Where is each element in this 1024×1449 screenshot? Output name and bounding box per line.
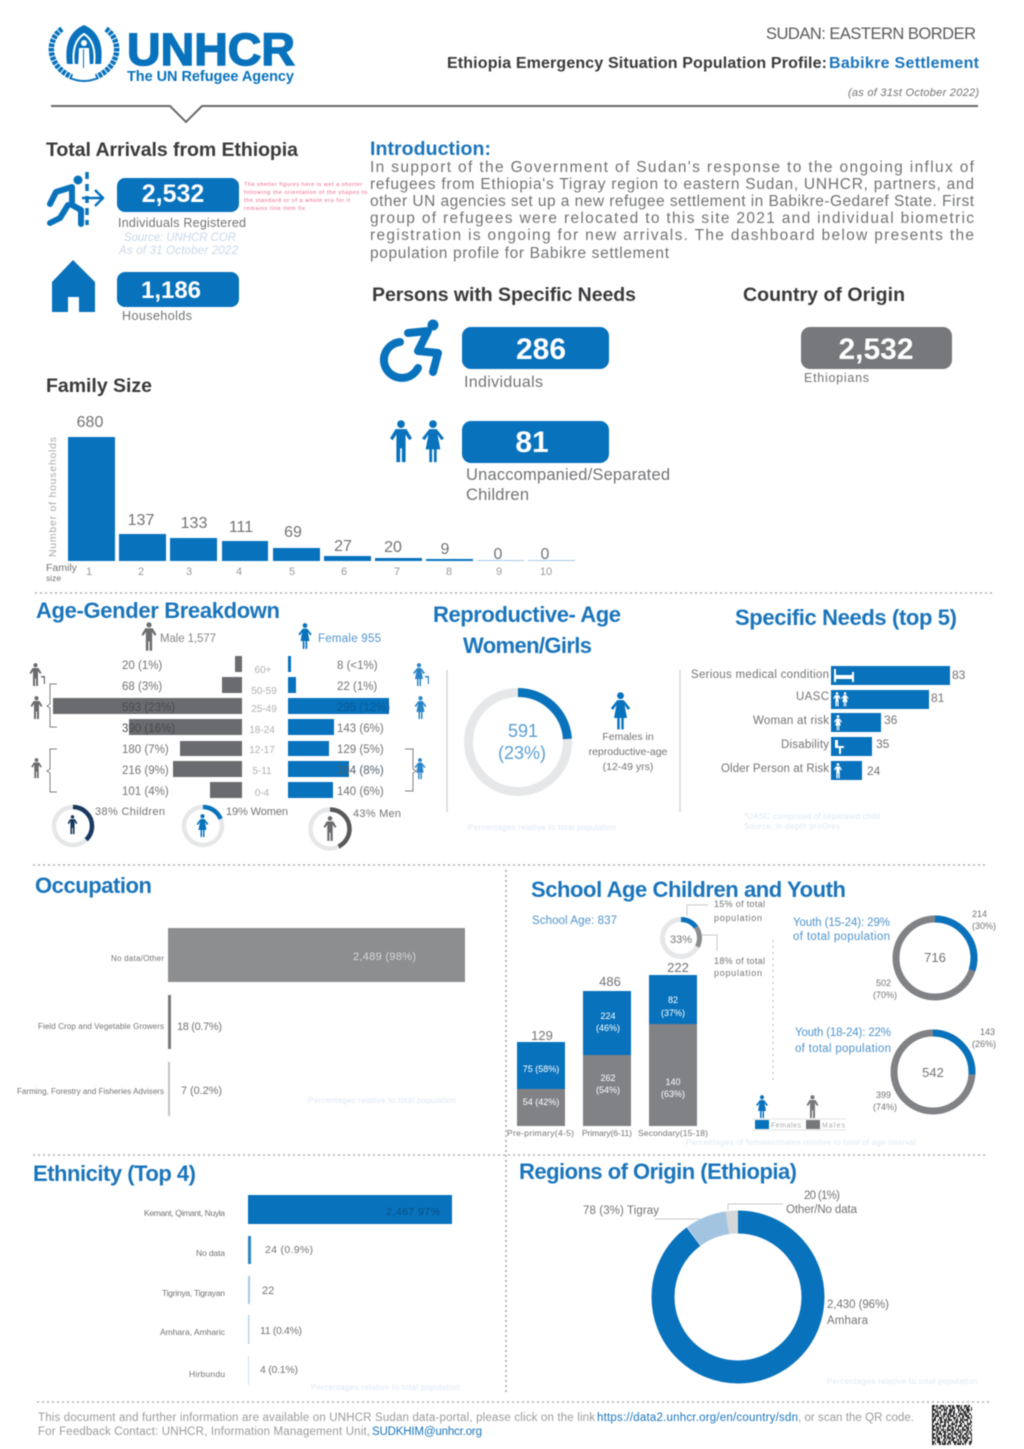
- labels: 2,430 (96%): [827, 1299, 889, 1311]
- body text: [370, 159, 975, 262]
- value: 81: [515, 426, 549, 459]
- age labels: 18-24: [249, 725, 275, 736]
- values: [177, 951, 416, 1097]
- category labels: Kemant, Qimant, Nuyla: [144, 1208, 225, 1218]
- labels: Other/No data: [786, 1204, 858, 1216]
- bar values: 20: [384, 539, 402, 556]
- notes: [744, 812, 880, 831]
- bar segment labels: (46%): [596, 1023, 620, 1033]
- category labels: Family: [46, 562, 78, 574]
- value: 286: [516, 333, 566, 366]
- icon: female: [298, 623, 312, 649]
- brackets: [47, 684, 416, 792]
- category labels: Tigrinya, Tigrayan: [162, 1288, 225, 1298]
- heading line 1: Reproductive- Age: [433, 602, 621, 627]
- stat box: [801, 327, 952, 369]
- ring: men: [310, 808, 401, 848]
- header rule with chevron: [51, 106, 978, 122]
- heading: Specific Needs (top 5): [735, 605, 957, 630]
- category labels: 10: [540, 566, 552, 578]
- youth 15-24: 214: [972, 909, 987, 919]
- body text: In support of the Government of Sudan's response to the ongoing influx of: [370, 159, 975, 176]
- bar values: 0: [541, 546, 550, 563]
- panel: reproductive-age women: [433, 602, 668, 832]
- donut captions: 15% of total: [714, 899, 765, 909]
- main title: Ethiopia Emergency Situation Population Profile:: [447, 55, 827, 72]
- panel: school age children and youth: [507, 877, 996, 1147]
- category labels: 1: [86, 566, 92, 578]
- female values: 129 (5%): [337, 744, 384, 756]
- values: 83: [952, 668, 966, 682]
- panel: family size: [46, 375, 575, 583]
- bar totals: [531, 960, 689, 1043]
- label: Unaccompanied/Separated: [466, 466, 670, 484]
- bar chart: family size: [68, 437, 575, 561]
- category labels: 2: [138, 566, 144, 578]
- small pink note: remains line item fix: [244, 206, 305, 212]
- bar segment labels: (63%): [661, 1089, 685, 1099]
- stat box: UASC: [462, 421, 609, 463]
- stat box: households: [117, 272, 239, 307]
- donut captions: 18% of total: [714, 956, 765, 966]
- age labels: 12-17: [249, 745, 275, 756]
- male values: [122, 660, 175, 798]
- youth 15-24: (70%): [873, 990, 897, 1000]
- category labels: 3: [186, 566, 192, 578]
- youth 15-24: 502: [876, 978, 891, 988]
- values: 7 (0.2%): [181, 1085, 222, 1097]
- donut captions: population: [714, 968, 762, 978]
- QR code: [932, 1406, 972, 1444]
- youth 15-24: (30%): [972, 921, 996, 931]
- labels: Amhara: [827, 1315, 869, 1327]
- body text: group of refugees were relocated to this site 2021 and individual biometric: [370, 210, 974, 227]
- labels: [583, 1190, 889, 1327]
- note: Percentages relative to total population: [468, 823, 616, 832]
- values: [260, 1206, 440, 1376]
- female values: 140 (6%): [337, 786, 384, 798]
- body text: refugees from Ethiopia's Tigray region to eastern Sudan, UNHCR, partners, and: [370, 176, 974, 193]
- youth 18-24: 399: [876, 1090, 891, 1100]
- heading: Total Arrivals from Ethiopia: [46, 139, 298, 161]
- bar segment labels: 75 (58%): [523, 1064, 559, 1074]
- youth 15-24: [793, 909, 996, 1000]
- caption: reproductive-age: [589, 746, 668, 758]
- bar segment labels: (37%): [661, 1008, 685, 1018]
- stat box: individuals: [117, 178, 239, 212]
- youth 15-24: Youth (15-24): 29%: [793, 917, 890, 929]
- panel: introduction: [370, 138, 975, 262]
- values: 24 (0.9%): [265, 1244, 313, 1256]
- values: 22: [262, 1285, 274, 1297]
- female values: 143 (6%): [337, 723, 384, 735]
- small pink note: The shelter figures here is wet a shorter: [244, 182, 362, 188]
- legend: Females: [771, 1122, 802, 1130]
- category labels: Hirbundu: [189, 1369, 225, 1379]
- heading: Introduction:: [370, 138, 491, 160]
- bar category labels: [507, 1128, 708, 1138]
- category labels: Woman at risk: [753, 715, 829, 727]
- wordmark: UNHCR: [127, 24, 295, 75]
- category labels: Farming, Forestry and Fisheries Advisers: [17, 1087, 164, 1096]
- donut chart: [468, 692, 568, 792]
- youth 18-24: [795, 1027, 996, 1112]
- stacked bar chart: [517, 975, 697, 1126]
- bar segment labels: 140: [665, 1077, 681, 1087]
- labels: 78 (3%) Tigray: [583, 1205, 659, 1217]
- bars: [831, 666, 950, 780]
- bar values: 111: [229, 519, 253, 536]
- bar category labels: Secondary(15-18): [638, 1128, 708, 1138]
- category labels: 7: [394, 566, 400, 578]
- ring: women: 19% Women: [226, 806, 288, 818]
- label: Ethiopians: [804, 371, 869, 385]
- small pink note: the standard or of a whole era for it: [244, 198, 350, 204]
- category labels: 5: [289, 566, 295, 578]
- panel: age-gender breakdown: [30, 598, 429, 848]
- youth 18-24: (26%): [972, 1039, 996, 1049]
- youth 15-24: 716: [924, 950, 946, 965]
- bar totals: 486: [599, 974, 621, 989]
- bar segment labels: 54 (42%): [523, 1097, 559, 1107]
- female bars: [288, 656, 389, 798]
- body text: registration is ongoing for new arrivals. The dashboard below presents the: [370, 227, 974, 244]
- donut captions: population: [714, 913, 762, 923]
- youth 15-24: of total population: [793, 931, 890, 943]
- bar icons: [833, 669, 854, 778]
- category labels: No data/Other: [111, 954, 164, 963]
- legend: Males: [822, 1122, 846, 1130]
- heading: Persons with Specific Needs: [372, 284, 636, 306]
- category labels: [17, 954, 164, 1096]
- ring: children: 38% Children: [95, 806, 165, 818]
- settlement name: Babikre Settlement: [829, 55, 980, 72]
- female total: Female 955: [318, 633, 381, 645]
- category labels: UASC: [796, 691, 829, 703]
- portal link: https://data2.unhcr.org/en/country/sdn: [597, 1412, 798, 1424]
- heading: School Age Children and Youth: [531, 877, 846, 902]
- caption: [589, 731, 668, 773]
- label: Individuals: [464, 374, 543, 391]
- tagline: The UN Refugee Agency: [127, 69, 294, 85]
- bar values: 69: [284, 524, 302, 541]
- values: 2,467 97%: [386, 1206, 440, 1218]
- source: Source: UNHCR COR: [124, 232, 236, 244]
- panel: regions of origin: [519, 1159, 978, 1402]
- icon: children: [390, 420, 444, 462]
- values: [867, 668, 966, 778]
- values: 24: [867, 764, 881, 778]
- footer line 1 end: , or scan the QR code.: [798, 1412, 914, 1424]
- icon: UNHCR emblem: [51, 25, 117, 81]
- donut chart: [633, 1192, 843, 1402]
- panel: country of origin: [743, 284, 952, 385]
- logo: UNHCR: [51, 24, 295, 85]
- bar segment labels: [523, 995, 685, 1107]
- male values: 180 (7%): [122, 744, 169, 756]
- icon: wheelchair: [384, 320, 438, 378]
- female values: 295 (12%): [337, 702, 390, 714]
- age labels: 5-11: [252, 766, 272, 777]
- category labels: 8: [446, 566, 452, 578]
- icons: female age groups: [413, 663, 429, 779]
- category labels: Field Crop and Vegetable Growers: [38, 1022, 164, 1031]
- youth 18-24: 542: [922, 1065, 944, 1080]
- bar values: 133: [181, 515, 207, 532]
- small pink note: following the orientation of the shapes to: [244, 190, 367, 196]
- heading: Regions of Origin (Ethiopia): [519, 1159, 797, 1184]
- age labels: [249, 665, 277, 799]
- bar values: [77, 414, 550, 563]
- male values: 20 (1%): [122, 660, 162, 672]
- bar category labels: Primary(6-11): [582, 1128, 632, 1138]
- values: 4 (0.1%): [260, 1364, 298, 1376]
- bar category labels: Pre-primary(4-5): [507, 1128, 574, 1138]
- category labels: size: [46, 573, 61, 583]
- donut captions: [714, 899, 765, 978]
- female values: 194 (8%): [337, 765, 384, 777]
- small donut: 33%: [670, 934, 692, 946]
- values: 11 (0.4%): [260, 1325, 302, 1337]
- icons: male age groups: [30, 663, 45, 778]
- ring: men: 43% Men: [353, 808, 401, 820]
- body text: other UN agencies set up a new refugee settlement in Babikre-Gedaref State. First: [370, 193, 975, 210]
- bar values: 27: [334, 538, 352, 555]
- notes: Source: in-depth proGres: [744, 822, 840, 831]
- category labels: [144, 1208, 226, 1379]
- bar values: 137: [128, 512, 154, 529]
- values: 18 (0.7%): [177, 1021, 222, 1033]
- bar values: 0: [494, 546, 503, 563]
- category labels: 6: [341, 566, 347, 578]
- labels: 20 (1%): [804, 1190, 840, 1202]
- bar totals: 222: [667, 960, 689, 975]
- axis label: Number of households: [47, 437, 59, 557]
- category labels: [691, 669, 829, 775]
- icon: person crossing border: [50, 172, 103, 225]
- values: 35: [876, 737, 890, 751]
- category labels: Disability: [781, 739, 829, 751]
- male bars: [53, 656, 242, 798]
- female values: 8 (<1%): [337, 660, 378, 672]
- footer line 2: For Feedback Contact: UNHCR, Information Management Unit,: [38, 1426, 370, 1438]
- icon: house: [52, 260, 95, 312]
- value: individuals: 2,532: [142, 180, 204, 208]
- youth 18-24: 143: [980, 1027, 995, 1037]
- youth 18-24: (74%): [873, 1102, 897, 1112]
- heading: Ethnicity (Top 4): [33, 1161, 196, 1186]
- school age total: School Age: 837: [532, 915, 617, 927]
- note: Percentages relative to total population: [311, 1383, 460, 1392]
- bar segment labels: 82: [668, 995, 678, 1005]
- note: Percentages relative to total population: [308, 1096, 456, 1105]
- heading: Family Size: [46, 375, 152, 397]
- legend: [752, 1095, 846, 1130]
- youth 18-24: of total population: [795, 1043, 891, 1055]
- ring: women: [184, 806, 288, 845]
- footer: [38, 1412, 914, 1438]
- category labels: [46, 562, 552, 583]
- heading: Age-Gender Breakdown: [36, 598, 280, 623]
- footer line 1: This document and further information are available on UNHCR Sudan data-portal, please click on the link: [38, 1412, 595, 1424]
- label: individuals: Individuals Registered: [118, 216, 246, 230]
- location: SUDAN: EASTERN BORDER: [766, 25, 976, 43]
- divider: [679, 670, 681, 812]
- bar segment labels: 262: [600, 1073, 616, 1083]
- category labels: 4: [236, 566, 242, 578]
- male total: Male 1,577: [160, 633, 216, 645]
- email: SUDKHIM@unhcr.org: [372, 1426, 482, 1438]
- ring: children: [54, 806, 165, 845]
- icon: male: [142, 622, 156, 651]
- caption: Females in: [602, 731, 654, 743]
- small donut: [662, 905, 717, 956]
- date: (as of 31st October 2022): [848, 87, 979, 99]
- age labels: 50-59: [251, 686, 277, 697]
- body text: population profile for Babikre settlement: [370, 245, 670, 262]
- category labels: Amhara, Amharic: [160, 1327, 226, 1337]
- male values: 101 (4%): [122, 786, 169, 798]
- small pink note: [244, 182, 367, 212]
- heading line 2: Women/Girls: [463, 633, 592, 658]
- panel: total arrivals: [46, 139, 367, 323]
- category labels: Serious medical condition: [691, 669, 829, 681]
- label line 2: Children: [466, 486, 529, 504]
- category labels: 9: [496, 566, 502, 578]
- female values: [337, 660, 390, 798]
- panel: persons with specific needs: [372, 284, 670, 504]
- panel: specific needs top 5: [680, 605, 966, 831]
- bar values: 9: [441, 541, 450, 558]
- values: 2,489 (98%): [353, 951, 416, 963]
- note: Percentages relative to total population: [827, 1377, 978, 1386]
- report title block: [447, 25, 980, 99]
- heading: Country of Origin: [743, 284, 905, 306]
- values: 81: [931, 691, 945, 705]
- notes: *UASC comprised of separated child: [744, 812, 880, 821]
- bars: [248, 1195, 452, 1385]
- divider left: [446, 670, 448, 812]
- age labels: 25-49: [251, 704, 277, 715]
- stat box: individuals: [462, 327, 609, 369]
- value: households: 1,186: [141, 277, 201, 304]
- heading: Occupation: [35, 873, 152, 898]
- panel: occupation: [17, 873, 465, 1116]
- youth 18-24: Youth (18-24): 22%: [795, 1027, 891, 1039]
- female values: 22 (1%): [337, 681, 377, 693]
- category labels: Older Person at Risk: [721, 763, 829, 775]
- age labels: 0-4: [255, 788, 270, 799]
- icon: pregnant woman: [611, 692, 630, 729]
- as-of date: As of 31 October 2022: [118, 245, 239, 257]
- bar totals: 129: [531, 1028, 553, 1043]
- caption: (12-49 yrs): [603, 761, 653, 773]
- bar segment labels: (54%): [596, 1085, 620, 1095]
- value: 2,532: [838, 333, 914, 366]
- values: 36: [884, 713, 898, 727]
- category labels: No data: [196, 1248, 225, 1258]
- donut chart: 591: [508, 721, 538, 741]
- panel: ethnicity: [33, 1161, 460, 1392]
- label: households: Households: [122, 309, 192, 323]
- age labels: 60+: [255, 665, 272, 676]
- male values: 390 (16%): [122, 723, 175, 735]
- male values: 593 (23%): [122, 702, 175, 714]
- male values: 68 (3%): [122, 681, 162, 693]
- male values: 216 (9%): [122, 765, 169, 777]
- bars: [168, 928, 465, 1116]
- bar segment labels: 224: [600, 1011, 616, 1021]
- leader lines: [655, 1204, 783, 1219]
- donut chart: (23%): [498, 743, 546, 763]
- note: Percentages of females/males relative to total of age interval: [686, 1138, 916, 1147]
- bar values: 680: [77, 414, 103, 431]
